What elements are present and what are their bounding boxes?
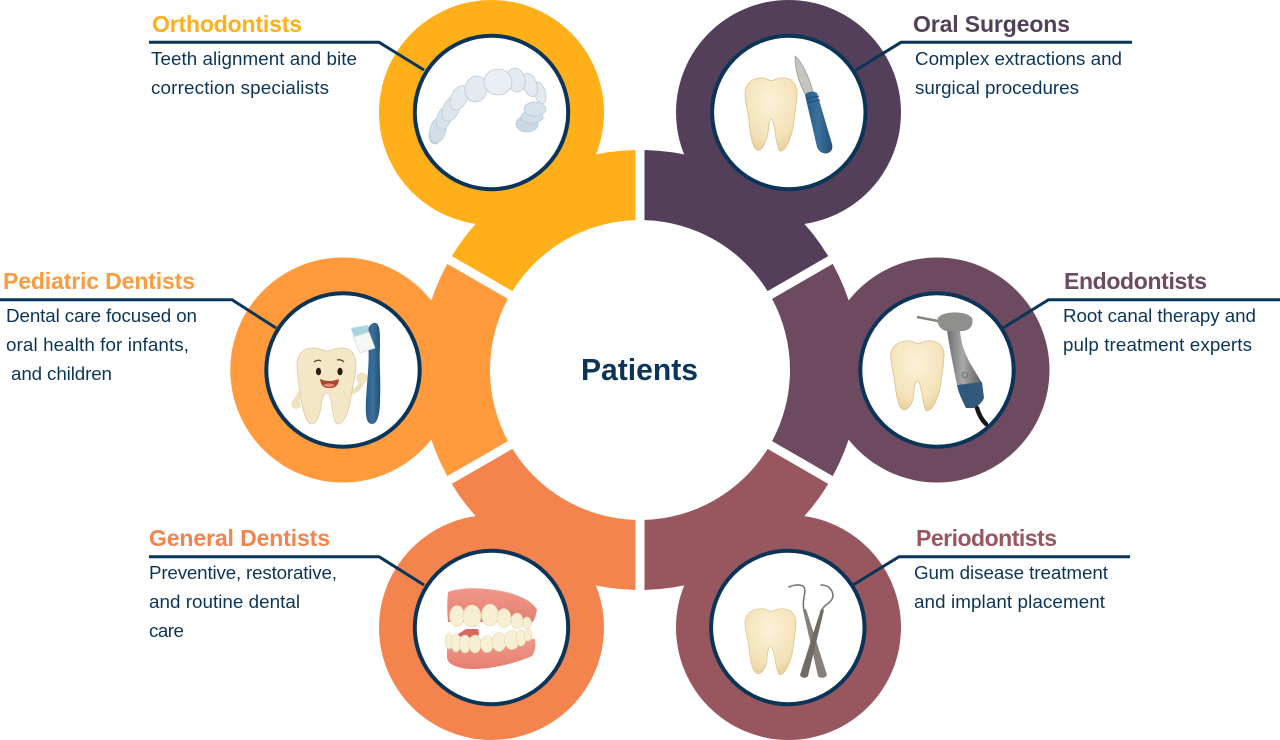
leader line: Orthodontists xyxy=(149,42,424,70)
text block: General Dentists: General Dentists xyxy=(149,525,330,551)
text block: Endodontists: Root canal therapy and xyxy=(1063,305,1256,326)
text block: Periodontists: Periodontists xyxy=(916,525,1057,551)
text block: Orthodontists: Teeth alignment and bite xyxy=(151,48,357,69)
leader line: Periodontists xyxy=(853,557,1130,585)
text block: Periodontists xyxy=(914,525,1109,612)
text block: Orthodontists xyxy=(151,11,357,98)
text block: Endodontists xyxy=(1063,268,1256,355)
title: Patients: Patients xyxy=(581,352,698,387)
text block: Orthodontists: Orthodontists xyxy=(152,11,302,37)
image ring: Endodontists xyxy=(860,293,1014,447)
image ring: Orthodontists xyxy=(415,36,568,189)
text block: Pediatric Dentists: and children xyxy=(11,363,112,384)
image ring: Oral Surgeons xyxy=(712,36,866,189)
text block: General Dentists: and routine dental xyxy=(149,591,300,612)
icon: denture model xyxy=(445,588,537,669)
text block: Periodontists: and implant placement xyxy=(914,591,1106,612)
segment and circle: Pediatric Dentists xyxy=(230,258,569,494)
segment and circle: Endodontists xyxy=(711,246,1050,482)
text block: Pediatric Dentists: oral health for infants, xyxy=(6,334,189,355)
icon: smiling tooth and toothbrush xyxy=(291,323,380,424)
leader line: Pediatric Dentists xyxy=(0,300,276,328)
text block: Oral Surgeons: surgical procedures xyxy=(915,77,1079,98)
segment and circle: General Dentists xyxy=(379,413,666,740)
text block: Endodontists: Endodontists xyxy=(1064,268,1207,294)
icon: tooth and scalpel xyxy=(745,56,832,154)
text block: Periodontists: Gum disease treatment xyxy=(914,562,1109,583)
text block: Pediatric Dentists: Pediatric Dentists xyxy=(3,268,195,294)
leader line: Endodontists xyxy=(1003,300,1280,328)
icon: tooth and dental handpiece xyxy=(891,312,986,424)
text block: Pediatric Dentists xyxy=(3,268,197,384)
leader line: General Dentists xyxy=(149,557,424,585)
text block: Orthodontists: correction specialists xyxy=(151,77,329,98)
icon: clear aligner xyxy=(427,66,548,145)
segment and circle: Orthodontists xyxy=(379,0,636,291)
text block: General Dentists xyxy=(149,525,337,641)
leader line: Oral Surgeons xyxy=(856,42,1132,70)
segment and circle: Oral Surgeons xyxy=(614,0,901,327)
icon: tooth and dental probes xyxy=(745,585,833,678)
segment and circle: Periodontists xyxy=(644,449,901,740)
text block: General Dentists: Preventive, restorative, xyxy=(149,562,337,583)
image ring: Periodontists xyxy=(711,551,864,704)
image ring: Pediatric Dentists xyxy=(266,293,420,447)
text block: Endodontists: pulp treatment experts xyxy=(1063,334,1252,355)
text block: General Dentists: care xyxy=(149,620,184,641)
image ring: General Dentists xyxy=(415,551,568,704)
text block: Oral Surgeons: Oral Surgeons xyxy=(913,11,1070,37)
text block: Pediatric Dentists: Dental care focused on xyxy=(6,305,197,326)
text block: Oral Surgeons: Complex extractions and xyxy=(915,48,1122,69)
text block: Oral Surgeons xyxy=(913,11,1122,98)
